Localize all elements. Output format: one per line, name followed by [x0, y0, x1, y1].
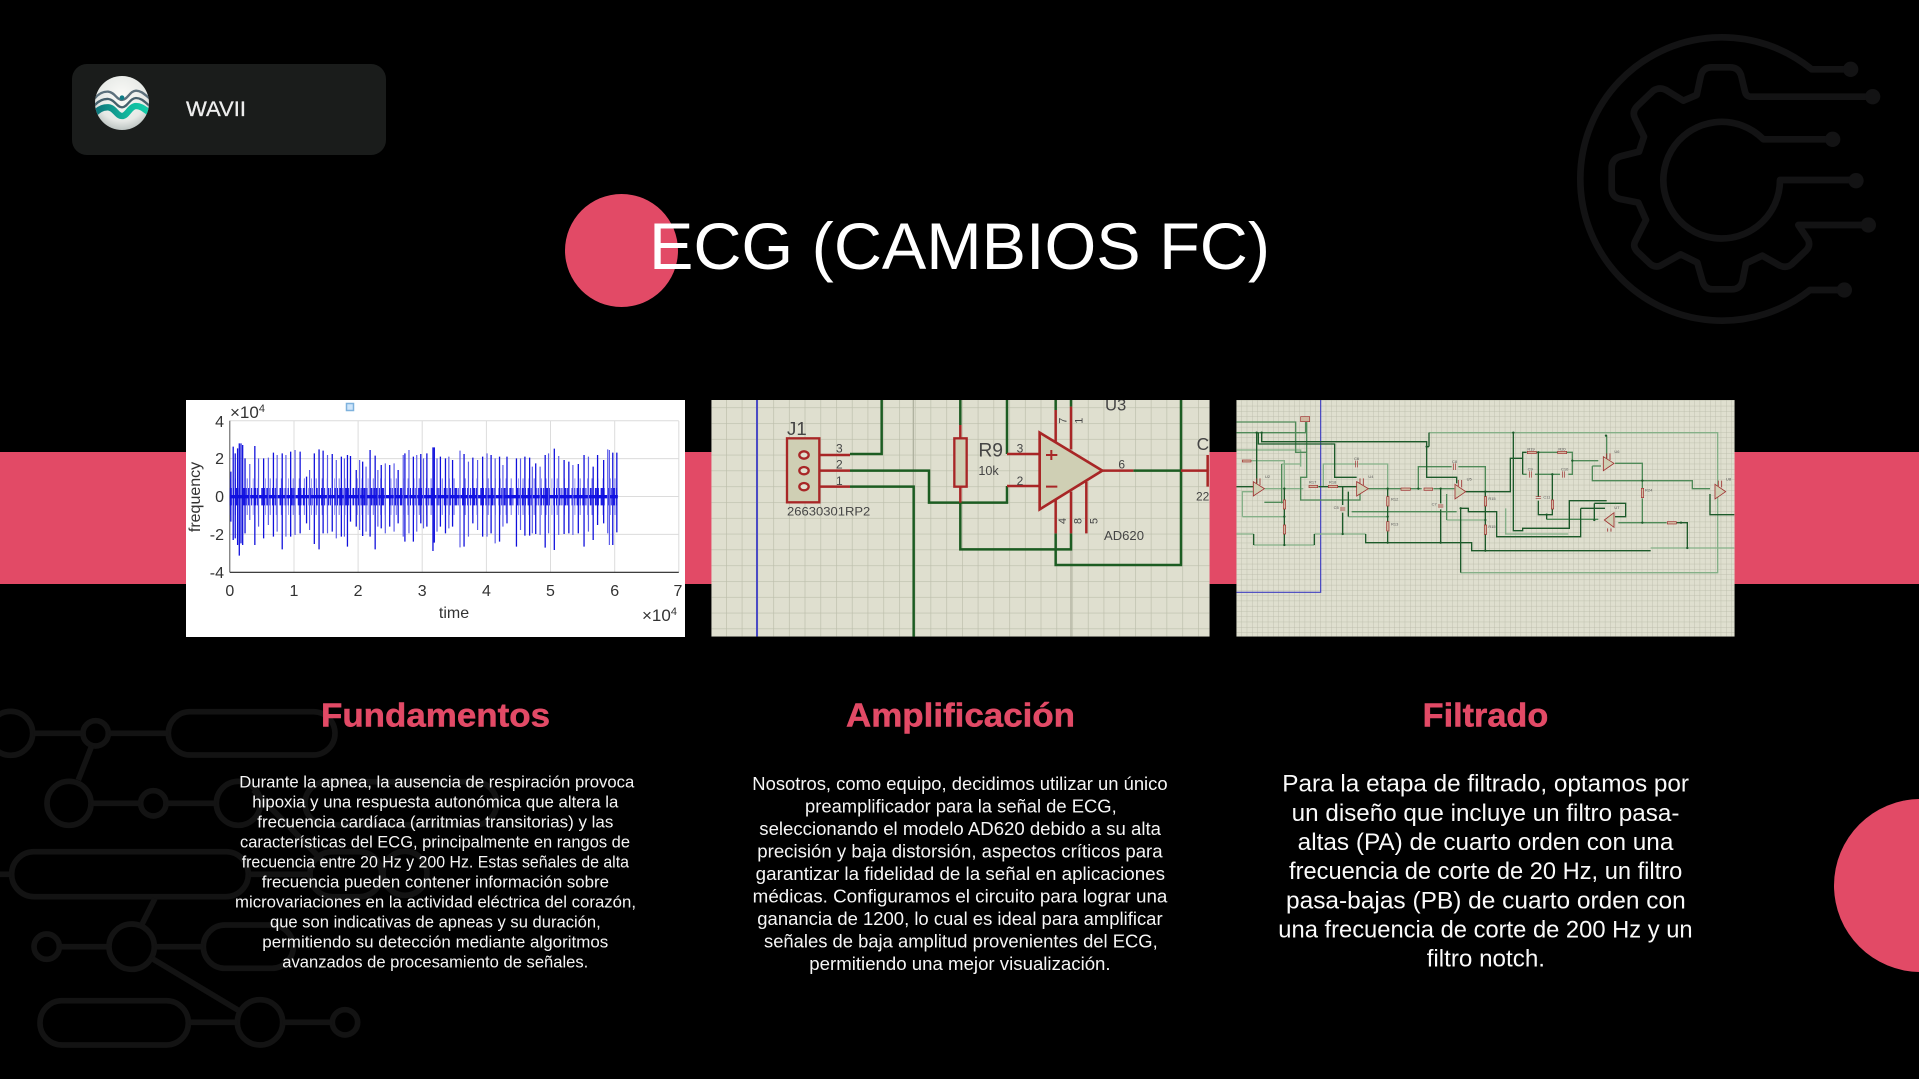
chart x exponent: ×10 [642, 606, 671, 625]
schematic labels: 26630301RP2 [787, 504, 871, 518]
text block [235, 772, 636, 971]
chart y exponent: ×10 [230, 403, 259, 422]
decorative pink band [0, 452, 1919, 584]
column: Amplificación [752, 697, 1168, 974]
chart x axis labels: 1 [290, 583, 299, 600]
text block: una frecuencia de corte de 200 Hz y un [1278, 916, 1693, 944]
text block: pasa-bajas (PB) de cuarto orden con [1286, 887, 1686, 914]
tiny schematic labels: U5 [1467, 477, 1473, 482]
ECG signal trace [230, 443, 618, 556]
schematic labels: 10k [978, 464, 999, 478]
panel: ECG chart [186, 400, 685, 637]
chart y axis title: frequency [187, 462, 204, 532]
chart x axis labels: 3 [418, 583, 427, 600]
icon: WAVII wave logo [93, 76, 151, 130]
chart x axis title: time [439, 605, 469, 622]
chart y axis labels [210, 414, 224, 582]
chart x axis labels [225, 583, 683, 600]
brand badge [72, 64, 386, 155]
resistors and capacitors [1242, 417, 1676, 534]
text block: filtro notch. [1427, 946, 1545, 973]
tiny schematic labels: C11 [1543, 494, 1551, 499]
chart x axis labels: 5 [546, 583, 555, 600]
decoration: gear circuit icon [1580, 37, 1880, 321]
chart grid and axes [230, 421, 679, 572]
text block: avanzados de procesamiento de señales. [282, 952, 588, 971]
decorative pink circle, right edge [1834, 799, 1919, 972]
tiny schematic labels: C10 [1561, 467, 1569, 472]
chart x axis labels: 6 [610, 583, 619, 600]
schematic labels: R9 [978, 441, 1003, 462]
decoration: node network [0, 711, 497, 1045]
chart y axis labels: 0 [215, 489, 224, 506]
chart x axis labels: 7 [674, 583, 683, 600]
junction dots [1255, 431, 1688, 552]
heading: Fundamentos [321, 697, 550, 734]
schematic labels: AD620 [1104, 529, 1144, 543]
schematic labels: 2 [1017, 474, 1024, 488]
text block: permitiendo una mejor visualización. [809, 953, 1111, 974]
title accent circle [565, 194, 678, 307]
schematic labels: 1 [1073, 418, 1085, 424]
text block: permitiendo su detección mediante algoritmos [262, 932, 608, 951]
tiny schematic labels: C7 [1432, 501, 1438, 506]
tiny schematic labels: C5 [1334, 505, 1340, 510]
tiny schematic labels: R13 [1391, 522, 1399, 527]
panel: filter schematic [1236, 400, 1735, 637]
schematic labels: C [1197, 434, 1209, 454]
text block: ganancia de 1200, lo cual es ideal para amplificar [757, 908, 1163, 929]
brand name: WAVII [186, 98, 246, 121]
dark wires [1236, 433, 1734, 573]
column: Fundamentos [235, 697, 636, 971]
tiny schematic labels: R12 [1391, 497, 1399, 502]
schematic labels: U3 [1105, 396, 1126, 415]
schematic labels: 7 [1058, 418, 1070, 424]
tiny schematic labels: R19 [1527, 446, 1535, 451]
chart x axis labels: 4 [482, 583, 491, 600]
schematic labels: 8 [1073, 518, 1085, 524]
medium wires [1236, 422, 1710, 523]
text block: un diseño que incluye un filtro pasa- [1292, 800, 1679, 827]
panel: amplifier schematic [711, 396, 1210, 637]
text block: seleccionando el modelo AD620 debido a su alta [759, 818, 1162, 839]
tiny schematic labels: R18 [1329, 480, 1337, 485]
text block: Durante la apnea, la ausencia de respiración provoca [239, 772, 635, 791]
chart y axis labels: -4 [210, 565, 224, 582]
schematic labels: 5 [1089, 518, 1101, 524]
chart marker [346, 404, 354, 410]
text block: frecuencia de corte de 20 Hz, un filtro [1289, 858, 1682, 885]
chart y axis labels: -2 [210, 527, 224, 544]
text block: Nosotros, como equipo, decidimos utilizar un único [752, 773, 1168, 794]
column: Filtrado [1278, 697, 1693, 973]
text block: médicas. Configuramos el circuito para lograr una [753, 885, 1168, 906]
chart y axis labels: 4 [215, 414, 224, 431]
text block: microvariaciones en la actividad eléctrica del corazón, [235, 892, 636, 911]
tiny schematic labels: R20 [1558, 446, 1566, 451]
schematic labels: 1 [836, 474, 843, 488]
chart x axis labels: 2 [354, 583, 363, 600]
tiny schematic labels: R17 [1309, 480, 1317, 485]
tiny schematic labels: C6 [1354, 456, 1360, 461]
tiny schematic labels: U6 [1614, 449, 1620, 454]
text block: señales de baja amplitud provenientes del ECG, [764, 930, 1158, 951]
chart x exponent: 4 [671, 606, 677, 618]
text block: garantizar la fidelidad de la señal en aplicaciones [756, 863, 1165, 884]
text block: Para la etapa de filtrado, optamos por [1282, 771, 1689, 798]
green wires [850, 400, 1181, 637]
text block: hipoxia y una respuesta autonómica que altera la [252, 792, 619, 811]
AD620 op amp [1040, 433, 1102, 509]
heading: Amplificación [846, 697, 1075, 734]
text block: que son indicativas de apneas y su duración, [270, 912, 601, 931]
title: ECG (CAMBIOS FC) [649, 209, 1270, 283]
text block: precisión y baja distorsión, aspectos críticos para [757, 840, 1163, 861]
text block [752, 773, 1168, 974]
tiny schematic labels: U8 [1726, 477, 1732, 482]
chart x axis labels: 0 [225, 583, 234, 600]
tiny schematic labels [1265, 446, 1732, 529]
tiny schematic labels: R15 [1488, 496, 1496, 501]
R9 resistor [954, 438, 967, 487]
text block: frecuencia pueden contener información sobre [262, 872, 609, 891]
tiny schematic labels: U4 [1368, 474, 1374, 479]
text block: características del ECG, principalmente en rangos de [240, 832, 630, 851]
schematic labels: 4 [1057, 518, 1069, 524]
tiny schematic labels: R15 [1488, 524, 1496, 529]
schematic labels: 22 [1196, 490, 1210, 504]
tiny schematic labels: R24 [1645, 488, 1653, 493]
chart y axis labels: 2 [215, 451, 224, 468]
chart y exponent: 4 [259, 403, 265, 415]
text block [1278, 771, 1693, 973]
text block: preamplificador para la señal de ECG, [805, 795, 1117, 816]
tiny schematic labels: U7 [1614, 505, 1620, 510]
light wires [1236, 433, 1734, 573]
tiny schematic labels: C9 [1528, 467, 1534, 472]
schematic labels: 6 [1118, 457, 1125, 471]
red wires [809, 407, 1208, 533]
schematic labels: J1 [787, 418, 807, 439]
schematic labels: 2 [836, 458, 843, 472]
J1 connector [787, 438, 819, 502]
schematic labels: 3 [1017, 442, 1024, 456]
tiny schematic labels: C8 [1452, 459, 1458, 464]
text block: altas (PA) de cuarto orden con una [1298, 829, 1674, 856]
text block: frecuencia cardíaca (arritmias transitorias) y las [257, 812, 613, 831]
schematic labels: 3 [836, 442, 843, 456]
text block: frecuencia entre 20 Hz y 200 Hz. Estas señales de alta [242, 852, 629, 871]
heading: Filtrado [1423, 697, 1548, 734]
op amps [1253, 453, 1726, 532]
schematic labels [787, 396, 1210, 543]
tiny schematic labels: U2 [1265, 474, 1271, 479]
